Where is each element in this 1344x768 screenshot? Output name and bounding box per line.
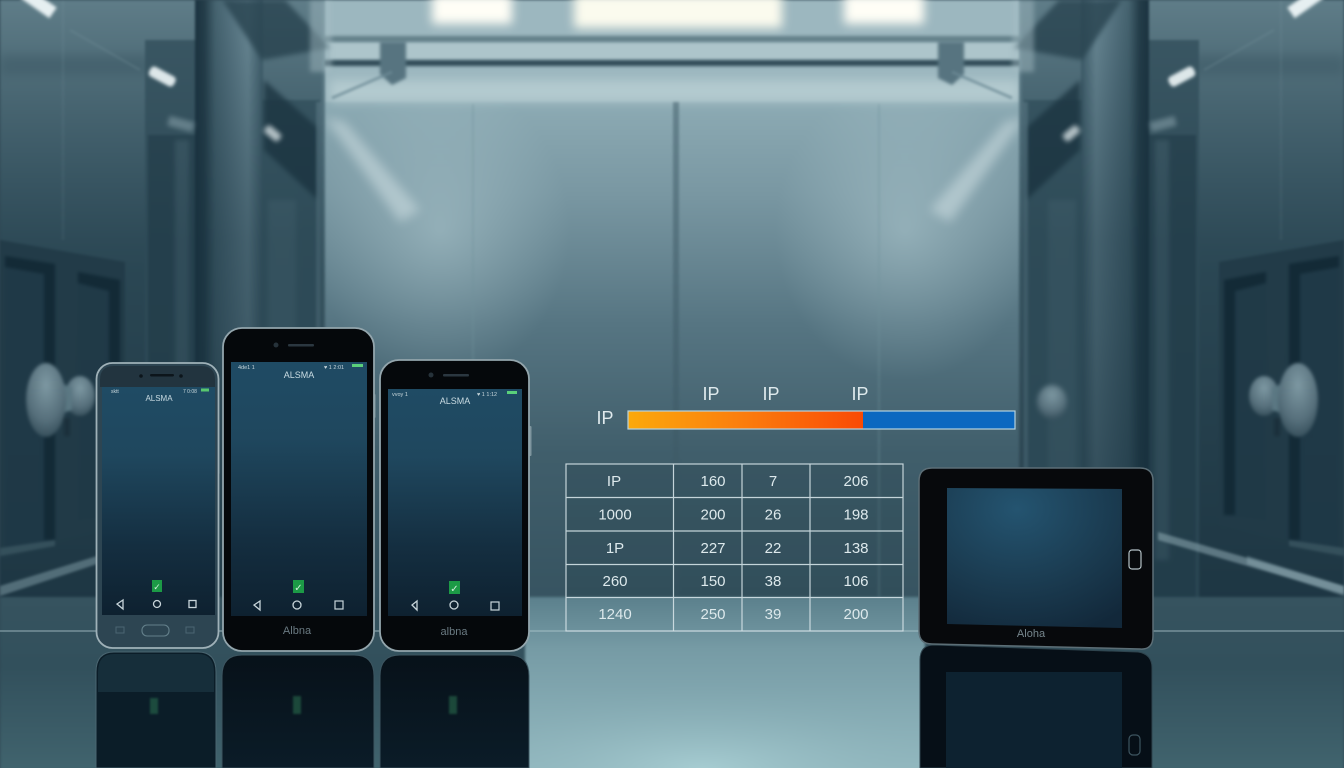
data table: 138 bbox=[843, 540, 869, 557]
check badge bbox=[152, 580, 162, 592]
data table: 260 bbox=[602, 573, 628, 590]
tablet screen bbox=[947, 488, 1122, 628]
phone 1 bbox=[96, 363, 220, 648]
data table: 150 bbox=[700, 573, 726, 590]
orange segment bbox=[628, 411, 863, 429]
stacked bar chart with IP labels: IP bbox=[851, 384, 869, 404]
data table bbox=[566, 464, 903, 631]
floor bbox=[0, 597, 1344, 768]
phone 3 bbox=[380, 360, 532, 651]
phone 3: ♥ 1 1:12 bbox=[477, 392, 497, 398]
reflection: tablet bbox=[920, 645, 1152, 768]
home button bbox=[142, 625, 169, 636]
phone body bbox=[223, 328, 374, 651]
data table: 250 bbox=[700, 606, 726, 623]
data table: 106 bbox=[843, 573, 869, 590]
brand: Aloha bbox=[1017, 628, 1046, 640]
phone screen bbox=[388, 389, 522, 616]
brand: albna bbox=[441, 626, 468, 638]
status bar: sktt bbox=[111, 389, 119, 395]
data table: 26 bbox=[765, 506, 781, 524]
data table: 200 bbox=[843, 606, 869, 623]
blue segment bbox=[863, 411, 1015, 429]
data table: 1000 bbox=[598, 506, 632, 524]
phone 2: ♥ 1 2:01 bbox=[324, 365, 344, 371]
phone 3: ✓ bbox=[450, 584, 459, 595]
back wall bbox=[300, 90, 1045, 610]
home button bbox=[1129, 550, 1141, 569]
data table: IP bbox=[607, 473, 621, 490]
screen title: ALSMA bbox=[145, 394, 173, 403]
data table: 160 bbox=[700, 473, 726, 490]
data table: 198 bbox=[843, 506, 869, 524]
status bar: vvoy 1 bbox=[392, 392, 408, 398]
data table: 1P bbox=[606, 540, 624, 557]
phone 2 bbox=[223, 328, 376, 651]
stacked bar chart with IP labels: IP bbox=[762, 384, 780, 404]
check badge bbox=[293, 580, 304, 593]
data table: 1240 bbox=[598, 606, 632, 623]
nav icons bbox=[254, 601, 260, 610]
phone 1: 7 0:08 bbox=[183, 389, 197, 395]
far-side knob bbox=[1037, 385, 1067, 419]
screen title: ALSMA bbox=[440, 396, 470, 406]
phone screen bbox=[102, 387, 215, 615]
data table: 227 bbox=[700, 540, 726, 557]
wall glow right bbox=[775, 80, 1035, 380]
nav icons bbox=[117, 600, 123, 609]
tablet bbox=[919, 468, 1153, 649]
light streaks bbox=[325, 118, 420, 222]
bar labels: IP bbox=[702, 384, 720, 404]
stacked bar chart with IP labels bbox=[596, 384, 1015, 429]
ceiling bbox=[200, 0, 1150, 102]
phone body bbox=[96, 363, 218, 648]
left wing bbox=[0, 0, 406, 600]
ceiling beams bbox=[150, 36, 1200, 42]
reflection: phone 3 bbox=[380, 655, 529, 768]
reflection: phone 2 bbox=[222, 655, 374, 768]
ceiling lights bbox=[432, 0, 512, 24]
phone 2: ✓ bbox=[294, 583, 303, 594]
data table: 39 bbox=[765, 606, 781, 623]
check badge bbox=[449, 581, 460, 594]
data table: 7 bbox=[769, 473, 777, 490]
data table: 200 bbox=[700, 506, 726, 524]
data table: 22 bbox=[765, 540, 781, 557]
data table: 38 bbox=[765, 573, 781, 590]
brand: Albna bbox=[283, 625, 312, 637]
wall seams bbox=[472, 104, 474, 599]
stacked bar chart with IP labels: IP bbox=[596, 408, 614, 428]
phone body bbox=[380, 360, 529, 651]
floor reflections of devices bbox=[96, 645, 1152, 768]
screen title: ALSMA bbox=[284, 370, 314, 380]
horizon line bbox=[0, 630, 1344, 632]
reflection: phone 1 bbox=[96, 652, 216, 768]
wall glow left bbox=[310, 80, 570, 380]
right wing bbox=[938, 0, 1344, 600]
phone 1: ✓ bbox=[153, 582, 161, 592]
nav icons bbox=[412, 601, 417, 610]
bar outline bbox=[628, 411, 1015, 429]
tablet body bbox=[919, 468, 1153, 649]
data table: 206 bbox=[843, 473, 869, 490]
status bar: 4de1 1 bbox=[238, 365, 255, 371]
phone screen bbox=[231, 362, 367, 616]
